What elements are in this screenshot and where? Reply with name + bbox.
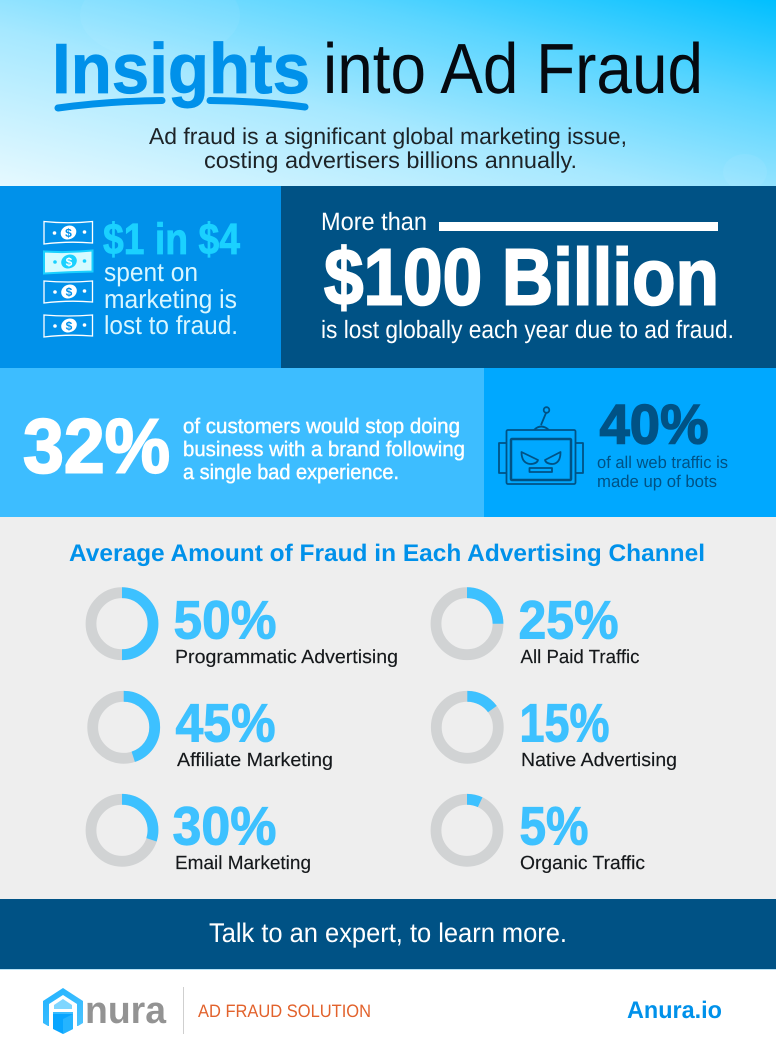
text: spent on marketing: spent on (104, 257, 198, 287)
text: web traffic (597, 453, 728, 491)
wordmark: nura (85, 990, 167, 1032)
channel: all paid traffic (436, 590, 640, 668)
subtitle: costing advertisers billions annually. (204, 147, 577, 173)
panel: call to action (0, 899, 776, 969)
tagline: AD FRAUD SOLUTION (198, 1001, 371, 1021)
donut: 15% (436, 696, 498, 758)
text: call to action: Talk to an expert, to learn more. (209, 918, 567, 948)
icon: banknote 2 highlighted: $ (66, 255, 73, 269)
text: spent on marketing: lost to fraud. (104, 310, 238, 340)
text: lost globally: is lost globally each year due to ad fraud. (321, 316, 734, 344)
panel: header (0, 0, 776, 190)
stat: 32%: 32% (23, 404, 170, 490)
icon: four banknotes (44, 222, 92, 337)
text: more than: More than (321, 208, 427, 236)
donut: 25% (436, 593, 498, 655)
channel: programmatic advertising (91, 590, 398, 668)
panel: 100 billion (281, 186, 776, 368)
text: customers stop: business with a brand following (183, 438, 465, 461)
title (52, 30, 703, 109)
label: programmatic advertising: Programmatic Advertising (175, 647, 398, 668)
value: 15%: 15% (520, 694, 610, 754)
donut: 5% (436, 799, 498, 861)
subtitle (149, 123, 627, 173)
donut: 50% (91, 593, 153, 655)
subtitle: Ad fraud is a significant global marketing issue, (149, 123, 627, 149)
label: all paid traffic: All Paid Traffic (520, 647, 640, 668)
website: Anura.io (627, 997, 722, 1024)
heading: Average Amount of Fraud in Each Advertising Channel (69, 540, 705, 567)
icon: banknote 1: $ (65, 226, 72, 240)
title underline (58, 100, 305, 108)
value: 25%: 25% (518, 590, 618, 650)
panel: 40 percent bots (484, 368, 776, 517)
donut: 45% (93, 696, 155, 758)
label: organic traffic: Organic Traffic (520, 853, 645, 874)
stat: $100 Billion: $100 Billion (324, 232, 719, 322)
channel: organic traffic (436, 796, 645, 874)
label: native advertising: Native Advertising (521, 750, 677, 771)
channel: native advertising (436, 694, 677, 771)
label: affiliate marketing: Affiliate Marketing (177, 750, 333, 771)
panel: footer (0, 969, 776, 1054)
panel: fraud by channel (0, 517, 776, 899)
stat: $1 in $4: $1 in $4 (103, 215, 240, 264)
text: spent on marketing: marketing is (104, 284, 237, 314)
accent bar (439, 222, 718, 231)
stat: 40%: 40% (600, 392, 708, 456)
donut: 30% (91, 799, 153, 861)
channel: affiliate marketing (93, 694, 333, 771)
divider (183, 987, 184, 1034)
label: email marketing: Email Marketing (175, 853, 311, 874)
value: 30%: 30% (172, 796, 276, 856)
text: customers stop: of customers would stop doing (183, 415, 460, 438)
text: customers stop: a single bad experience. (183, 461, 399, 484)
value: 5%: 5% (520, 796, 588, 856)
text: spent on marketing (104, 257, 238, 340)
value: 50%: 50% (174, 590, 276, 650)
panel: one in four dollars (0, 186, 281, 368)
title: Insights (52, 30, 310, 109)
text: customers stop (183, 415, 465, 484)
text: web traffic: of all web traffic is (597, 453, 728, 472)
value: 45%: 45% (176, 694, 276, 754)
text: web traffic: made up of bots (597, 472, 717, 491)
icon: banknote 3: $ (66, 285, 73, 299)
icon: robot (499, 407, 583, 484)
panel: 32 percent customers (0, 368, 484, 517)
icon: banknote 4: $ (66, 319, 73, 333)
logo: Anura (43, 988, 167, 1034)
title: into Ad Fraud (323, 30, 703, 109)
icon: Anura hexagon (43, 988, 83, 1034)
channel: email marketing (91, 796, 311, 874)
